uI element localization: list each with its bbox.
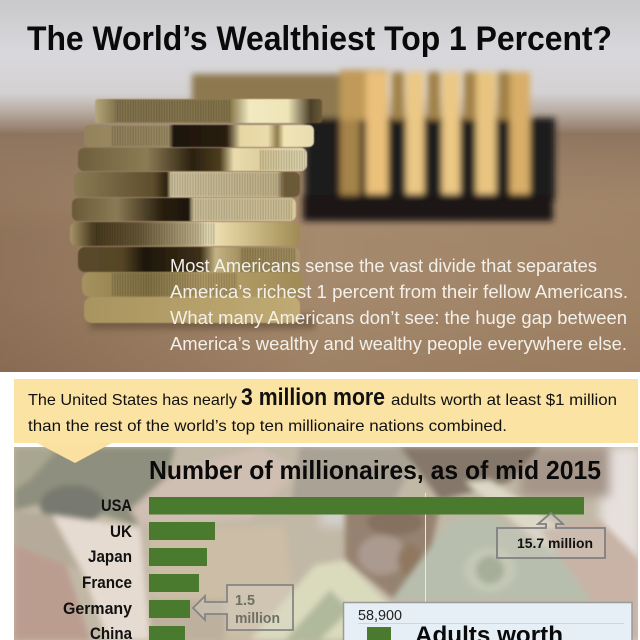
callout arrow: 1.5 million: million	[235, 611, 280, 627]
bar labels: France	[82, 574, 132, 592]
bar labels	[63, 497, 133, 640]
intro text block: Most Americans sense the vast divide that separates	[170, 256, 597, 276]
callout banner	[14, 379, 638, 463]
bar labels: UK	[110, 523, 132, 541]
coin stack	[70, 99, 322, 323]
bar chart: millionaires by country	[63, 497, 584, 640]
coin shadow	[90, 315, 315, 329]
callout banner: The United States has nearly	[28, 392, 237, 409]
chart title: Number of millionaires, as of mid 2015	[149, 455, 601, 485]
bar labels: USA	[101, 497, 132, 515]
photo: stacked gold coins	[0, 0, 640, 372]
callout arrow: 15.7 million	[497, 513, 605, 558]
intro text block: What many Americans don’t see: the huge gap between	[170, 308, 627, 328]
title: The World’s Wealthiest Top 1 Percent?	[27, 20, 612, 58]
bar labels: Germany	[63, 600, 133, 618]
callout banner: than the rest of the world’s top ten millionaire nations combined.	[28, 418, 507, 435]
intro text block	[170, 256, 628, 354]
callout banner: adults worth at least $1 million	[391, 392, 617, 409]
intro text block: America’s richest 1 percent from their fellow Americans.	[170, 282, 628, 302]
panel: adults worth legend: 58,900	[358, 608, 402, 624]
panel: money collage background	[14, 447, 640, 640]
callout arrow: 1.5 million: 1.5	[235, 593, 255, 609]
blurred bullets rack	[192, 70, 555, 221]
panel: adults worth legend	[344, 602, 632, 640]
callout arrow: 15.7 million: 15.7 million	[517, 535, 593, 551]
callout banner: 3 million more	[241, 384, 385, 411]
intro text block: America’s wealthy and wealthy people everywhere else.	[170, 334, 627, 354]
bar labels: Japan	[88, 548, 132, 566]
bars	[149, 497, 584, 640]
callout arrow: 1.5 million	[193, 585, 293, 630]
